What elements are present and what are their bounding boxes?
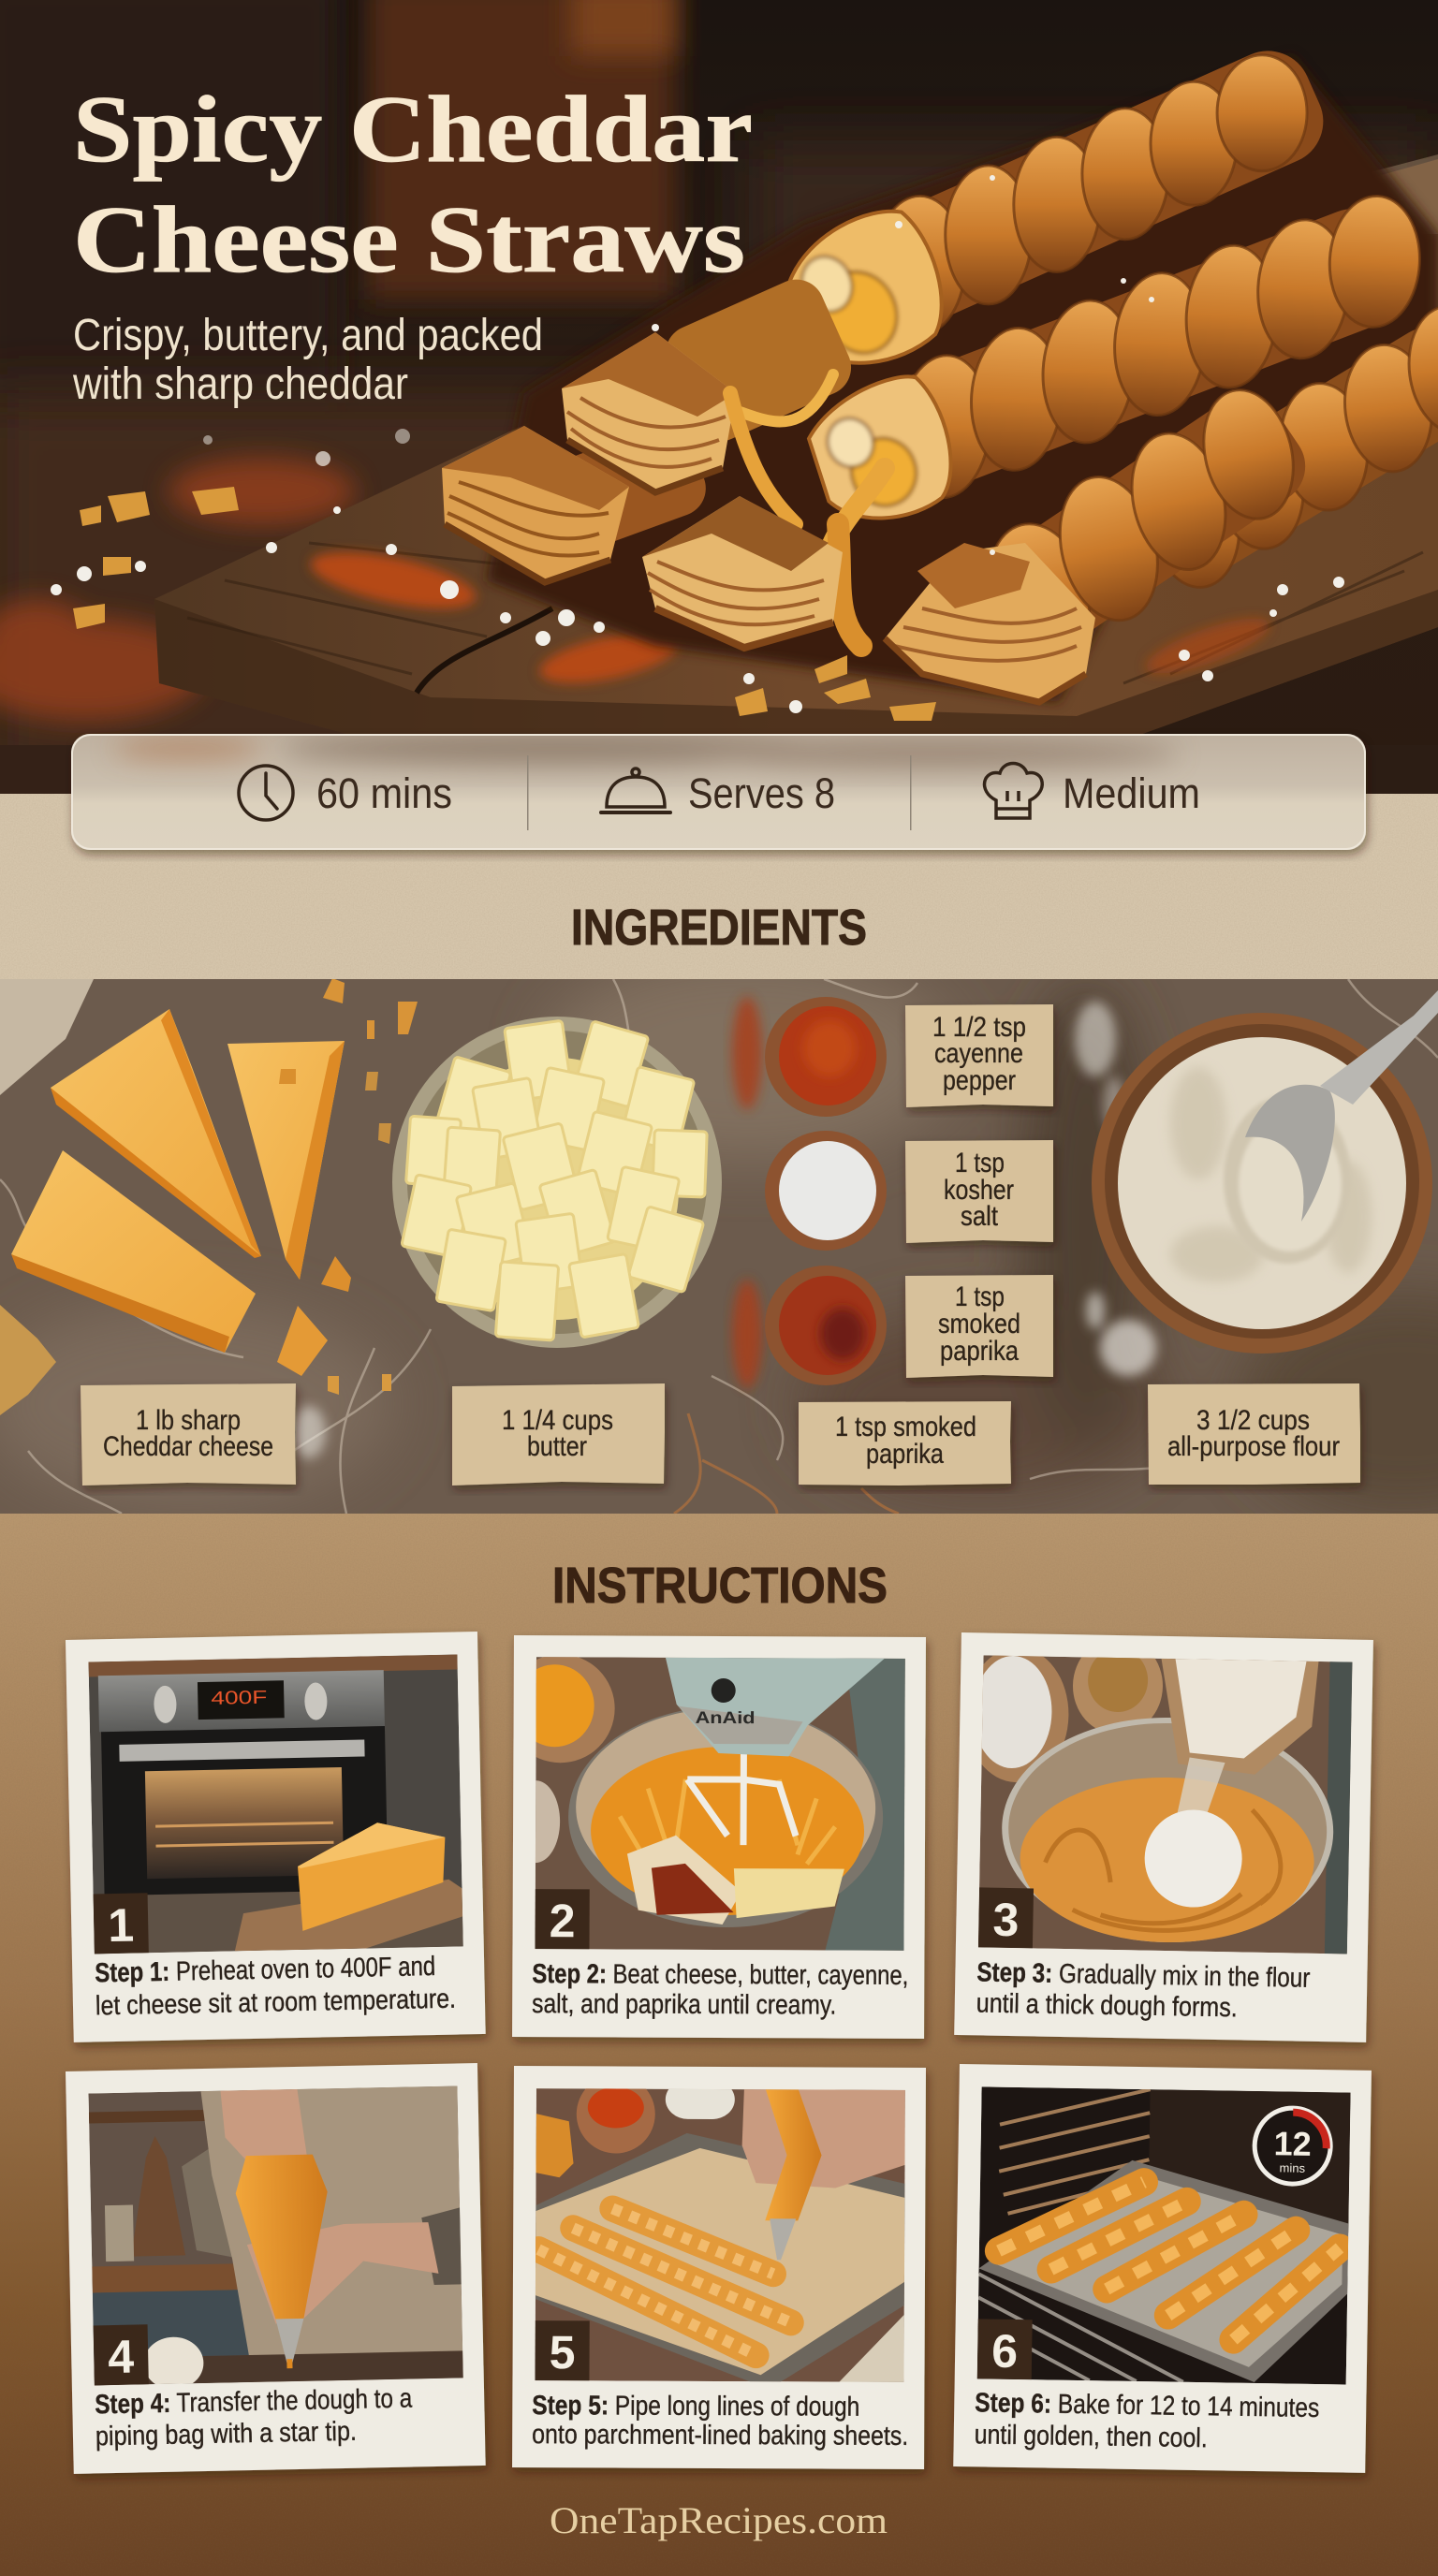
panel: ingredients marble: salt — [961, 1201, 999, 1232]
caption: step 2 — [532, 1959, 908, 2021]
panel: ingredients marble: 1 tsp — [955, 1281, 1005, 1312]
pastry: upper left block — [562, 271, 860, 492]
caption: step 5 — [532, 2391, 908, 2452]
caption: step 5: Step 5: Pipe long lines of dough — [532, 2391, 859, 2422]
icon: timer: mins — [1279, 2160, 1306, 2175]
caption: step 1 — [95, 1952, 456, 2021]
caption: step 4: Step 4: Transfer the dough to a — [95, 2384, 413, 2420]
kitchen cloth — [0, 979, 94, 1095]
footer: website: OneTapRecipes.com — [550, 2499, 888, 2541]
photo: baking in oven: 6 — [991, 2325, 1019, 2378]
title: Spicy Cheddar — [73, 77, 753, 183]
title: Cheese Straws — [73, 187, 745, 293]
card: step 2 — [505, 1635, 926, 2039]
pastry: rear right straw — [1172, 307, 1438, 589]
salt flakes and crumbs — [51, 175, 1344, 713]
photo: oven and cheese — [88, 1654, 463, 1954]
panel: ingredients marble: 3 1/2 cups — [1196, 1405, 1310, 1436]
label: smoked paprika bottom — [799, 1401, 1011, 1486]
card: step 4 — [66, 2063, 486, 2474]
subtitle: with sharp cheddar — [72, 359, 408, 409]
red spice dust on table — [0, 458, 356, 721]
panel: ingredients marble: Cheddar cheese — [103, 1431, 273, 1462]
panel: ingredients marble: 1 tsp smoked — [835, 1412, 976, 1442]
pastry: front right block end — [885, 543, 1095, 702]
photo: adding flour: 3 — [992, 1894, 1020, 1946]
panel: ingredients marble: 1 1/4 cups — [502, 1405, 613, 1436]
heading: instructions: INSTRUCTIONS — [552, 1558, 888, 1614]
difficulty: Medium — [1063, 769, 1200, 817]
bowl: kosher salt — [765, 1131, 887, 1251]
photo: mixer with cheese — [505, 1654, 905, 1951]
photo: adding flour — [961, 1634, 1353, 1954]
caption: step 6: Step 6: Bake for 12 to 14 minutes — [975, 2388, 1320, 2423]
section: hero photo of cheese straws — [0, 0, 1438, 805]
card: step 3 — [954, 1632, 1373, 2042]
label: salt — [905, 1140, 1053, 1243]
caption: step 4 — [95, 2384, 414, 2452]
label: flour — [1148, 1383, 1360, 1485]
title — [73, 77, 753, 293]
label: cayenne — [905, 1004, 1053, 1107]
panel: ingredients marble: pepper — [943, 1065, 1016, 1096]
card: step 6 — [953, 2064, 1372, 2473]
label: cheddar — [81, 1383, 296, 1486]
panel: ingredients marble: 1 lb sharp — [136, 1405, 241, 1436]
caption: step 1: let cheese sit at room temperature. — [95, 1984, 456, 2021]
pastry shadow mass — [487, 56, 1438, 702]
section: instructions background — [0, 1514, 1438, 2576]
servings: Serves 8 — [688, 769, 835, 817]
caption: step 5: onto parchment-lined baking sheets. — [532, 2420, 908, 2452]
label: smoked paprika side — [905, 1275, 1053, 1378]
panel: ingredients marble: all-purpose flour — [1167, 1431, 1340, 1462]
panel: ingredients marble: 1 1/2 tsp — [932, 1012, 1026, 1043]
spice on board — [306, 541, 1275, 693]
pastry: front centre block — [642, 496, 843, 648]
panel: ingredients marble: smoked — [938, 1309, 1020, 1339]
photo: filling piping bag: 4 — [108, 2331, 135, 2383]
icon: cheddar wedges — [11, 978, 418, 1395]
caption: step 3: Step 3: Gradually mix in the flour — [976, 1957, 1311, 1994]
card: step 1 — [66, 1632, 486, 2042]
label: butter — [452, 1383, 665, 1486]
panel: ingredients marble: paprika — [866, 1439, 944, 1470]
caption: step 1: Step 1: Preheat oven to 400F and — [95, 1952, 436, 1988]
marble veins — [0, 979, 1438, 1514]
caption: step 4: piping bag with a star tip. — [95, 2417, 357, 2452]
photo: mixer with cheese: 2 — [550, 1895, 576, 1947]
bread piece — [0, 1305, 56, 1415]
icon: timer — [1252, 2105, 1333, 2187]
heading: ingredients: INGREDIENTS — [571, 900, 867, 956]
plate of butter cubes — [392, 1017, 722, 1348]
card: step 5 — [512, 2066, 926, 2469]
bowl: smoked paprika — [765, 1266, 887, 1385]
panel: ingredients marble: butter — [527, 1431, 587, 1462]
panel: ingredients marble: 1 tsp — [955, 1148, 1005, 1178]
panel: ingredients marble: paprika — [940, 1336, 1019, 1367]
photo: filling piping bag — [88, 2086, 463, 2391]
bowl: cayenne pepper — [765, 997, 887, 1117]
bowl of flour with spoon — [1092, 990, 1438, 1354]
section: beige paper background — [0, 794, 1438, 981]
caption: step 3 — [976, 1957, 1311, 2025]
photo: oven and cheese: 400F — [211, 1688, 268, 1709]
panel: ingredients marble: cayenne — [934, 1038, 1023, 1069]
time: 60 mins — [316, 769, 452, 817]
caption: step 2: salt, and paprika until creamy. — [532, 1989, 836, 2021]
photo: oven and cheese: 1 — [108, 1899, 135, 1952]
photo: piping dough: 5 — [550, 2326, 576, 2378]
flour dust — [292, 1002, 1156, 1458]
melted cheese strands — [730, 374, 885, 646]
subtitle: Crispy, buttery, and packed — [73, 311, 543, 360]
icon: timer: 12 — [1273, 2124, 1312, 2163]
pastry: middle straw with broken end — [807, 195, 1421, 520]
icon: clock — [239, 766, 293, 820]
caption: step 3: until a thick dough forms. — [976, 1988, 1238, 2023]
info bar — [71, 732, 1366, 850]
icon: chef hat — [985, 764, 1042, 818]
icon: serving cloche — [601, 768, 670, 812]
wooden cutting board — [154, 154, 1438, 749]
panel: ingredients marble: kosher — [944, 1175, 1014, 1206]
caption: step 6 — [975, 2388, 1320, 2455]
caption: step 6: until golden, then cool. — [975, 2420, 1208, 2453]
photo: baking in oven — [977, 2086, 1351, 2385]
pastry: top straw with broken end — [763, 12, 1355, 395]
caption: step 2: Step 2: Beat cheese, butter, cayenne, — [532, 1959, 908, 1991]
pastry: front right twisted straw — [932, 348, 1348, 706]
photo: piping dough — [535, 2074, 905, 2390]
panel: ingredients marble — [0, 955, 1438, 1516]
pastry: far left block — [442, 417, 713, 582]
subtitle — [72, 311, 543, 409]
photo: mixer with cheese: AnAid — [696, 1708, 756, 1727]
spilled spice — [732, 997, 762, 1388]
